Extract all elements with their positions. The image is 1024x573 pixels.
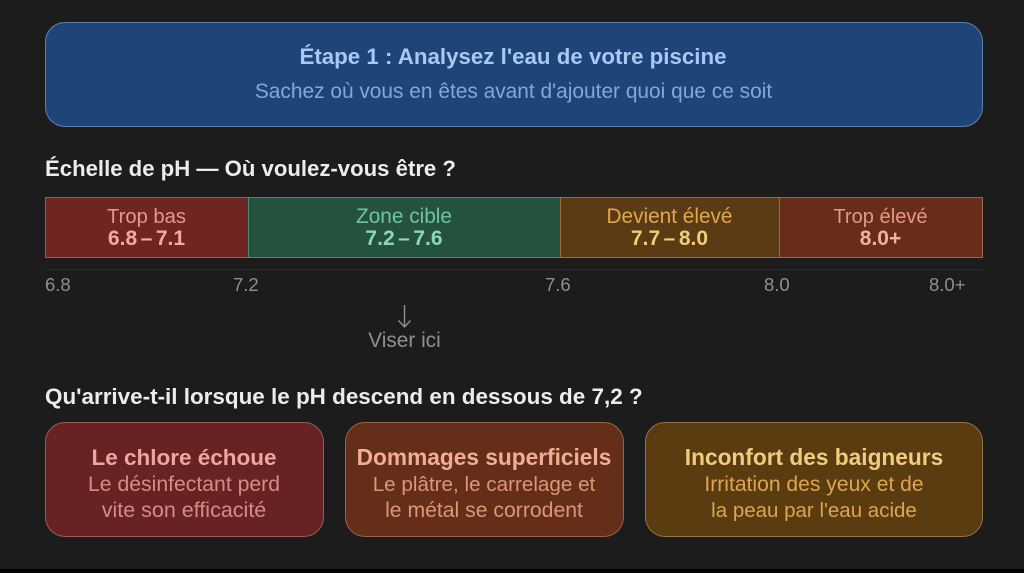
- bottom edge strip: [0, 569, 1024, 573]
- segment: target zone: [248, 197, 561, 258]
- banner subtitle: Sachez où vous en êtes avant d'ajouter quoi que ce soit: [255, 80, 772, 103]
- target label: Viser ici: [368, 329, 441, 352]
- card title: Le chlore échoue: [91, 445, 277, 470]
- card text: Irritation des yeux et de: [704, 473, 924, 496]
- card: bather discomfort: [645, 422, 983, 537]
- card: chlorine fails: [45, 422, 324, 537]
- card text: vite son efficacité: [102, 498, 266, 522]
- segment: too high: [779, 197, 983, 258]
- label: too low: Trop bas: [107, 206, 186, 228]
- card title: Dommages superficiels: [357, 444, 611, 470]
- axis line: [45, 269, 983, 270]
- card text: [704, 473, 924, 522]
- tick 8.0+: 8.0+: [929, 274, 966, 295]
- card text: le métal se corrodent: [385, 499, 583, 522]
- range: getting high: 7.7 – 8.0: [631, 227, 708, 250]
- range: too high: 8.0+: [860, 227, 901, 250]
- banner panel: [45, 22, 983, 127]
- label: too high: Trop élevé: [833, 206, 928, 228]
- segment: too low: [45, 197, 249, 258]
- heading: pH scale: Échelle de pH — Où voulez-vous être ?: [45, 156, 456, 181]
- banner title: Étape 1 : Analysez l'eau de votre piscine: [299, 44, 727, 69]
- tick 7.2: 7.2: [233, 274, 259, 295]
- card text: [373, 473, 596, 522]
- pH scale bar: [45, 197, 983, 258]
- tick 7.6: 7.6: [545, 274, 571, 295]
- card text: Le plâtre, le carrelage et: [373, 473, 595, 496]
- range: target zone: 7.2 – 7.6: [365, 227, 443, 250]
- heading: below 7.2: Qu'arrive-t-il lorsque le pH descend en dessous de 7,2 ?: [45, 384, 643, 409]
- card title: Inconfort des baigneurs: [685, 444, 943, 470]
- card: surface damage: [345, 422, 624, 537]
- card text: la peau par l'eau acide: [711, 499, 917, 522]
- range: too low: 6.8 – 7.1: [108, 227, 185, 250]
- tick 6.8: 6.8: [45, 274, 71, 295]
- label: target zone: Zone cible: [356, 205, 452, 228]
- segment: getting high: [560, 197, 780, 258]
- label: getting high: Devient élevé: [606, 205, 733, 228]
- tick 8.0: 8.0: [764, 274, 790, 295]
- icon: down arrow: [398, 305, 411, 328]
- card text: Le désinfectant perd: [88, 473, 280, 496]
- card text: [88, 473, 280, 522]
